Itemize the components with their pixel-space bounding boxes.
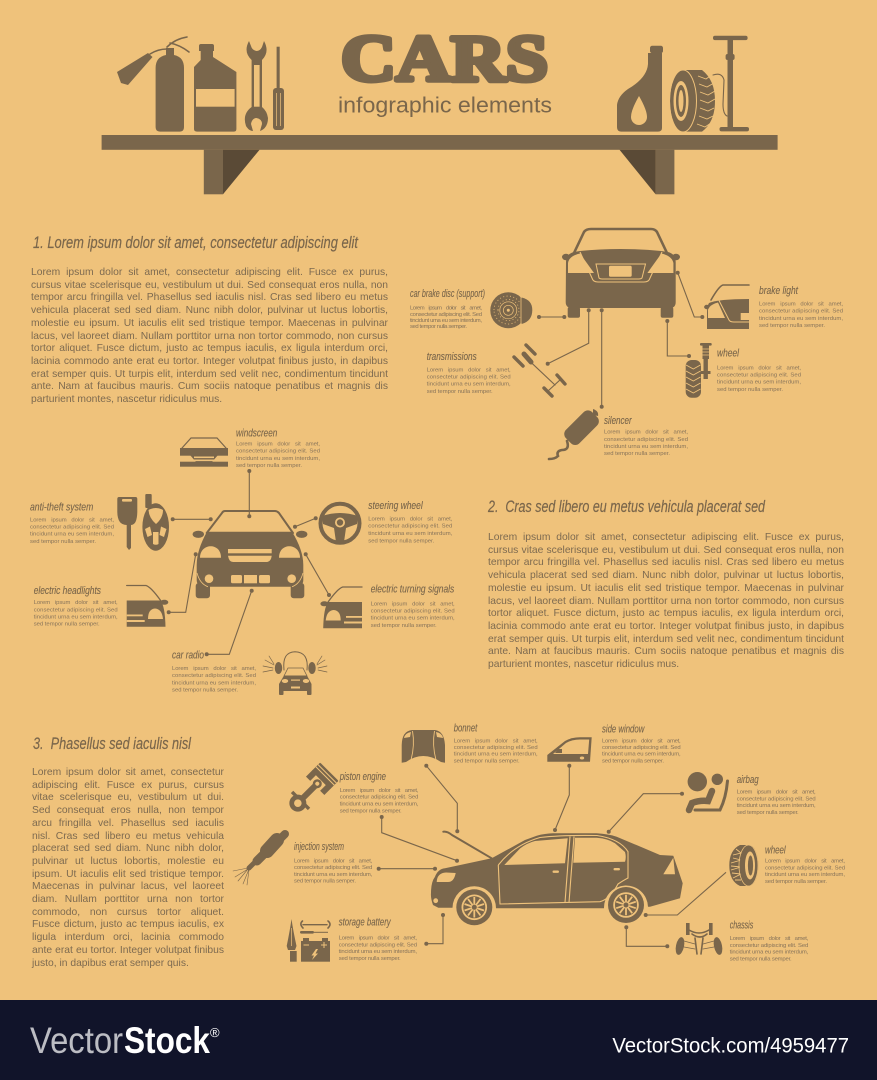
- text block 2: parturient montes, nascetur ridiculus mus.: [488, 659, 679, 670]
- caption: electric headlights: Lorem ipsum dolor sit amet,: [34, 600, 118, 606]
- caption: wheel: sed tempor nulla semper.: [717, 387, 783, 393]
- caption: injection system: Lorem ipsum dolor sit amet,: [294, 858, 373, 864]
- caption: airbag: airbag: [737, 774, 759, 786]
- caption: electric headlights: tincidunt urna eu sem interdum,: [34, 614, 118, 620]
- text block 3: commodo, non cursus tortor aliquet.: [32, 907, 224, 918]
- caption: car radio: car radio: [172, 650, 204, 662]
- caption: airbag: sed tempor nulla semper.: [737, 810, 799, 816]
- caption: silencer: [604, 415, 688, 457]
- icon: wrench: [245, 41, 268, 131]
- caption: wheel: [717, 348, 801, 393]
- icon: tyre: [670, 70, 715, 132]
- caption: car radio: [172, 650, 256, 693]
- icon: storage battery and tools: [287, 919, 330, 962]
- icon: air pump: [713, 36, 749, 131]
- caption: storage battery: tincidunt urna eu sem interdum,: [339, 949, 417, 955]
- connector: car radio: [205, 589, 254, 656]
- logo: Stock: [124, 1020, 210, 1061]
- caption: piston engine: [339, 771, 419, 814]
- connector: steering wheel: [293, 516, 318, 529]
- icon: side window: [547, 737, 592, 762]
- caption: storage battery: storage battery: [339, 917, 392, 929]
- icon: screwdriver: [273, 47, 284, 130]
- caption: silencer: consectetur adipiscing elit. Sed: [604, 437, 688, 443]
- registered mark: ®: [210, 1025, 220, 1040]
- caption: side window: consectetur adipiscing elit. Sed: [602, 745, 681, 751]
- caption: anti-theft system: anti-theft system: [30, 502, 93, 514]
- text block 2: cursus vitae scelerisque eu, vestibulum ut dui. Sed consequat eros nulla, non: [488, 545, 844, 556]
- text block 2: ante. Nam at faucibus mauris. Cum sociis natoque penatibus et magnis dis: [488, 646, 844, 657]
- connector: windscreen: [247, 469, 251, 518]
- caption: bonnet: Lorem ipsum dolor sit amet,: [454, 738, 538, 744]
- caption: airbag: [737, 774, 816, 816]
- caption: electric turning signals: tincidunt urna eu sem interdum,: [371, 616, 455, 622]
- text block 1: vehicula placerat sed sed diam. Nunc nibh dolor, pulvinar ut luctus lobortis,: [31, 305, 388, 316]
- caption: anti-theft system: Lorem ipsum dolor sit amet,: [30, 517, 114, 523]
- connector: silencer: [600, 308, 604, 409]
- icon: wheel with suspension: [686, 343, 712, 398]
- connector: anti-theft: [171, 517, 213, 521]
- url: VectorStock.com/4959477: [612, 1035, 849, 1058]
- icon: brake disc: [490, 292, 532, 328]
- caption: piston engine: tincidunt urna eu sem interdum,: [340, 802, 419, 808]
- caption: windscreen: [236, 428, 320, 469]
- text block 1: parturient montes, nascetur ridiculus mus.: [31, 394, 222, 405]
- caption: electric headlights: electric headlights: [34, 585, 101, 597]
- connector: storage battery: [424, 913, 445, 946]
- text block 3: ipsum. Ut iaculis elit sed tristique tempor.: [32, 869, 224, 880]
- logo: Vector: [30, 1020, 123, 1061]
- caption: brake light: consectetur adipiscing elit. Sed: [759, 309, 843, 315]
- heading 2: 2. Cras sed libero eu metus vehicula placerat sed: [487, 497, 765, 516]
- caption: transmissions: consectetur adipiscing elit. Sed: [427, 375, 511, 381]
- header shelf with tools and title: [102, 22, 778, 194]
- caption: steering wheel: [368, 500, 453, 544]
- text block 2: lacus, vel laoreet diam. Nullam porttitor urna non tortor commodo, non cursus: [488, 596, 844, 607]
- text block 2: [488, 532, 844, 670]
- caption: brake light: [759, 285, 843, 329]
- caption: side window: side window: [602, 723, 645, 735]
- icon: turning signal: [320, 587, 362, 628]
- caption: steering wheel: Lorem ipsum dolor sit amet,: [368, 517, 453, 523]
- caption: wheel: Lorem ipsum dolor sit amet,: [717, 365, 801, 371]
- caption: car brake disc: tincidunt urna eu sem interdum,: [410, 318, 482, 324]
- caption: brake light: Lorem ipsum dolor sit amet,: [759, 302, 843, 308]
- caption: transmissions: Lorem ipsum dolor sit amet,: [427, 367, 511, 373]
- rear car: [562, 229, 680, 318]
- caption: injection system: consectetur adipiscing elit. Sed: [294, 865, 372, 871]
- caption: steering wheel: sed tempor nulla semper.: [368, 538, 435, 544]
- caption: brake light: tincidunt urna eu sem interdum,: [759, 316, 843, 322]
- subtitle: infographic elements: [338, 92, 552, 118]
- icon: transmission: [514, 345, 565, 396]
- footer bar: [0, 1000, 877, 1080]
- text block 1: ante. Nam at faucibus mauris. Cum sociis natoque penatibus et magnis dis: [31, 381, 388, 392]
- icon: electric headlight: [127, 586, 168, 627]
- text block 3: arcu fringilla vel. Phasellus sed iaculis: [32, 818, 224, 829]
- caption: wheel: tincidunt urna eu sem interdum,: [717, 380, 801, 386]
- caption: airbag: Lorem ipsum dolor sit amet,: [737, 790, 816, 796]
- connector: bonnet: [424, 764, 459, 833]
- caption: side window: [602, 723, 681, 765]
- caption: bonnet: tincidunt urna eu sem interdum,: [454, 752, 538, 758]
- diagram: front view of car: [30, 428, 455, 695]
- caption: car radio: sed tempor nulla semper.: [172, 687, 238, 693]
- caption: anti-theft system: [30, 502, 114, 545]
- connector: wheel: [665, 319, 691, 358]
- icon: alarm remote: [142, 494, 169, 551]
- caption: electric headlights: consectetur adipiscing elit. Sed: [34, 607, 118, 613]
- caption: windscreen: sed tempor nulla semper.: [236, 463, 302, 469]
- caption: wheel: sed tempor nulla semper.: [765, 879, 827, 885]
- caption: windscreen: Lorem ipsum dolor sit amet,: [236, 442, 320, 448]
- icon: airbag: [688, 772, 728, 810]
- caption: injection system: sed tempor nulla semper.: [294, 879, 356, 885]
- caption: electric headlights: sed tempor nulla semper.: [34, 622, 100, 628]
- text block 3: Fusce dictum, justo ac tempus iaculis, ex: [32, 919, 224, 930]
- connector: turning signals: [304, 552, 331, 597]
- text block 3: diam. Nullam porttitor urna non tortor: [32, 894, 224, 905]
- front car: [193, 511, 307, 598]
- caption: transmissions: sed tempor nulla semper.: [427, 389, 493, 395]
- title: CARS: CARS: [341, 22, 548, 96]
- caption: steering wheel: consectetur adipiscing elit. Sed: [368, 524, 452, 530]
- caption: wheel: consectetur adipiscing elit. Sed: [765, 865, 845, 871]
- caption: side window: Lorem ipsum dolor sit amet,: [602, 738, 681, 744]
- caption: side window: tincidunt urna eu sem interdum,: [602, 752, 681, 758]
- caption: chassis: Lorem ipsum dolor sit amet,: [730, 936, 809, 942]
- text block 2: lacinia commodo ante erat eu tortor. Integer volutpat finibus justo, in dapibus: [488, 621, 844, 632]
- caption: wheel: wheel: [765, 844, 786, 856]
- caption: bonnet: [454, 723, 538, 765]
- caption: injection system: [294, 841, 373, 885]
- caption: wheel: tincidunt urna eu sem interdum,: [765, 872, 845, 878]
- caption: car radio: Lorem ipsum dolor sit amet,: [172, 666, 256, 672]
- caption: windscreen: tincidunt urna eu sem interdum,: [236, 456, 320, 462]
- icon: piston engine: [283, 762, 339, 818]
- caption: car brake disc: [410, 288, 485, 330]
- text block 3: vitae scelerisque eu, vestibulum ut dui.: [32, 792, 224, 803]
- caption: piston engine: piston engine: [339, 771, 386, 783]
- caption: storage battery: sed tempor nulla semper.: [339, 956, 401, 962]
- caption: wheel: Lorem ipsum dolor sit amet,: [765, 859, 845, 865]
- caption: windscreen: consectetur adipiscing elit. Sed: [236, 449, 320, 455]
- icon: car key: [117, 497, 137, 550]
- rear wheel: [608, 887, 644, 923]
- text block 1: molestie eu ipsum. Ut iaculis elit sed tristique tempor. Maecenas in pulvinar: [31, 318, 388, 329]
- icon: steering wheel: [320, 504, 360, 543]
- caption: injection system: tincidunt urna eu sem interdum,: [294, 872, 373, 878]
- caption: electric turning signals: consectetur adipiscing elit. Sed: [371, 609, 455, 615]
- caption: piston engine: sed tempor nulla semper.: [340, 808, 402, 814]
- text block 1: [31, 267, 388, 405]
- caption: airbag: tincidunt urna eu sem interdum,: [737, 803, 816, 809]
- text block 1: lacinia commodo ante erat eu tortor. Integer volutpat finibus justo, in dapibus: [31, 356, 388, 367]
- caption: car brake disc: Lorem ipsum dolor sit amet,: [410, 306, 482, 312]
- caption: brake light: sed tempor nulla semper.: [759, 323, 825, 329]
- connector: wheel: [644, 872, 726, 917]
- icon: fire extinguisher: [117, 37, 189, 132]
- caption: anti-theft system: tincidunt urna eu sem interdum,: [30, 532, 114, 538]
- caption: transmissions: tincidunt urna eu sem interdum,: [427, 382, 511, 388]
- front wheel: [456, 889, 492, 925]
- connector: headlights: [167, 552, 198, 614]
- caption: piston engine: Lorem ipsum dolor sit amet,: [340, 788, 419, 794]
- caption: chassis: [730, 919, 809, 963]
- caption: transmissions: transmissions: [427, 351, 477, 363]
- text block 1: cursus vitae scelerisque eu, vestibulum ut dui. Sed consequat eros nulla, non: [31, 280, 388, 291]
- connector: airbag: [607, 792, 684, 834]
- text block 3: justo, in dapibus erat semper quis.: [32, 958, 189, 969]
- caption: car brake disc: car brake disc (support): [410, 288, 485, 300]
- text block 1: erat semper quis. Ut turpis elit, interdum sed velit nec, condimentum tincidunt: [31, 369, 388, 380]
- text block 2: tortor aliquet. Fusce dictum, justo ac tempus iaculis, ex ligula interdum orci,: [488, 608, 844, 619]
- caption: airbag: consectetur adipiscing elit. Sed: [737, 796, 816, 802]
- text block 1: lacus, vel laoreet diam. Nullam porttitor urna non tortor commodo, non cursus: [31, 331, 388, 342]
- connector: side window: [553, 764, 571, 832]
- caption: car brake disc: sed tempor nulla semper.: [410, 324, 467, 330]
- connector: brake light: [676, 271, 704, 319]
- text block 3: pulvinar ut luctus lobortis, molestie eu: [32, 856, 224, 867]
- text block 2: Lorem ipsum dolor sit amet, consectetur adipiscing elit. Fusce ex purus,: [488, 532, 844, 543]
- icon: chassis: [674, 923, 724, 956]
- caption: car radio: tincidunt urna eu sem interdum,: [172, 680, 256, 686]
- text block 3: [32, 767, 224, 969]
- icon: bonnet: [402, 730, 445, 763]
- caption: silencer: Lorem ipsum dolor sit amet,: [604, 430, 688, 436]
- caption: bonnet: sed tempor nulla semper.: [454, 759, 520, 765]
- connector: transmissions: [546, 308, 591, 366]
- text block 1: Lorem ipsum dolor sit amet, consectetur adipiscing elit. Fusce ex purus,: [31, 267, 388, 278]
- text block 3: nisl. Cras sed libero eu metus vehicula: [32, 831, 224, 842]
- icon: car radio with headphones: [263, 652, 327, 695]
- text block 2: molestie eu ipsum. Ut iaculis elit sed tristique tempor. Maecenas in pulvinar: [488, 583, 844, 594]
- text block 3: Maecenas in pulvinar lacus, vel laoreet: [32, 881, 224, 892]
- caption: windscreen: windscreen: [236, 428, 277, 440]
- caption: chassis: consectetur adipiscing elit. Sed: [730, 943, 808, 949]
- connector: injection system: [377, 867, 437, 871]
- caption: wheel: [765, 844, 845, 885]
- text block 2: vehicula placerat sed sed diam. Nunc nibh dolor, pulvinar ut luctus lobortis,: [488, 570, 844, 581]
- icon: injector: [233, 834, 285, 885]
- side car: [431, 832, 683, 908]
- icon: tyre: [729, 845, 758, 886]
- caption: car brake disc: consectetur adipiscing elit. Sed: [410, 312, 482, 318]
- caption: electric turning signals: electric turning signals: [371, 583, 455, 595]
- text block 2: tempor arcu fringilla vel. Phasellus sed iaculis nisl. Cras sed libero eu metus: [488, 557, 844, 568]
- caption: brake light: brake light: [759, 285, 799, 297]
- caption: steering wheel: steering wheel: [368, 500, 423, 512]
- caption: electric turning signals: Lorem ipsum dolor sit amet,: [371, 601, 455, 607]
- caption: wheel: wheel: [717, 348, 739, 360]
- caption: chassis: tincidunt urna eu sem interdum,: [730, 950, 809, 956]
- caption: silencer: silencer: [604, 415, 633, 427]
- left bracket: [204, 150, 260, 194]
- caption: side window: sed tempor nulla semper.: [602, 759, 664, 765]
- text block 3: ante erat eu tortor. Integer volutpat finibus: [32, 945, 224, 956]
- icon: silencer: [549, 408, 601, 459]
- text block 3: placerat sed sed diam. Nunc nibh dolor,: [32, 843, 224, 854]
- text block 3: Lorem ipsum dolor sit amet, consectetur: [32, 767, 224, 778]
- icon: brake light: [704, 285, 749, 329]
- caption: piston engine: consectetur adipiscing elit. Sed: [340, 795, 418, 801]
- icon: oil canister: [194, 44, 236, 132]
- caption: silencer: sed tempor nulla semper.: [604, 451, 670, 457]
- text block 3: adipiscing elit. Fusce ex purus, cursus: [32, 780, 224, 791]
- caption: bonnet: bonnet: [454, 723, 478, 735]
- caption: wheel: consectetur adipiscing elit. Sed: [717, 372, 801, 378]
- text block 3: Sed consequat eros nulla, non tempor: [32, 805, 224, 816]
- caption: electric turning signals: [371, 583, 455, 629]
- heading 1: 1. Lorem ipsum dolor sit amet, consectetur adipiscing elit: [33, 233, 359, 252]
- heading 3: 3. Phasellus sed iaculis nisl: [33, 734, 192, 753]
- caption: transmissions: [427, 351, 511, 395]
- icon: oil jug: [617, 46, 663, 132]
- connector: brake disc: [537, 315, 566, 319]
- connector: chassis: [624, 925, 669, 948]
- diagram: rear view of car: [410, 229, 843, 459]
- caption: chassis: sed tempor nulla semper.: [730, 957, 792, 963]
- text block 1: tempor arcu fringilla vel. Phasellus sed iaculis nisl. Cras sed libero eu metus: [31, 292, 388, 303]
- caption: storage battery: [339, 917, 417, 962]
- text block 3: ligula interdum orci, lacinia commodo: [32, 932, 224, 943]
- caption: injection system: injection system: [294, 841, 344, 853]
- shelf board: [102, 135, 778, 150]
- caption: silencer: tincidunt urna eu sem interdum,: [604, 444, 688, 450]
- caption: electric turning signals: sed tempor nulla semper.: [371, 623, 437, 629]
- text block 1: tortor aliquet. Fusce dictum, justo ac tempus iaculis, ex ligula interdum orci,: [31, 343, 388, 354]
- caption: storage battery: consectetur adipiscing elit. Sed: [339, 942, 417, 948]
- icon: windscreen: [180, 438, 228, 467]
- connector: piston engine: [380, 815, 459, 863]
- text block 2: erat semper quis. Ut turpis elit, interdum sed velit nec, condimentum tincidunt: [488, 634, 844, 645]
- caption: anti-theft system: consectetur adipiscing elit. Sed: [30, 525, 114, 531]
- diagram: side view of car: [233, 723, 845, 963]
- caption: anti-theft system: sed tempor nulla semper.: [30, 539, 96, 545]
- caption: electric headlights: [34, 585, 118, 628]
- caption: steering wheel: tincidunt urna eu sem interdum,: [368, 531, 453, 537]
- caption: car radio: consectetur adipiscing elit. Sed: [172, 673, 256, 679]
- caption: bonnet: consectetur adipiscing elit. Sed: [454, 745, 538, 751]
- caption: storage battery: Lorem ipsum dolor sit amet,: [339, 935, 417, 941]
- caption: chassis: chassis: [730, 919, 754, 931]
- right bracket: [620, 150, 674, 194]
